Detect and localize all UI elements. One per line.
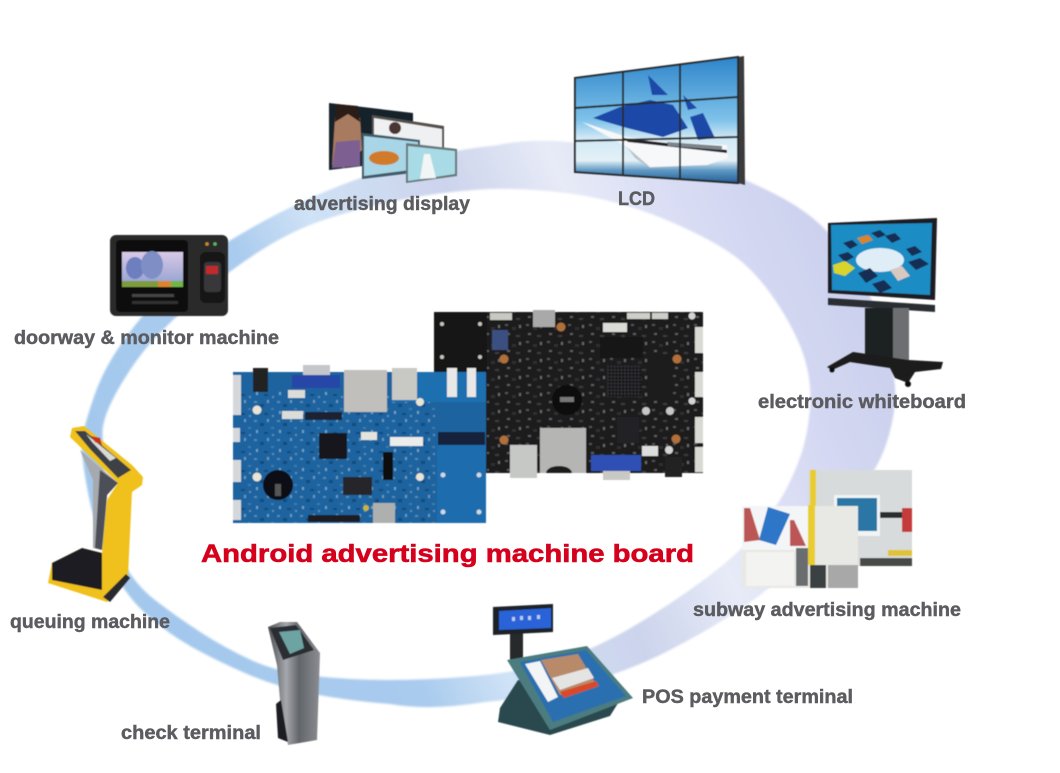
label: check terminal: check terminal	[121, 722, 261, 744]
main boards	[233, 310, 703, 523]
label: subway advertising machine: subway advertising machine	[693, 599, 961, 621]
icon: check terminal	[268, 622, 320, 745]
black board	[434, 310, 703, 480]
label: electronic whiteboard: electronic whiteboard	[758, 391, 966, 413]
icon: LCD video wall	[575, 56, 745, 185]
blue board	[233, 365, 486, 523]
icon: doorway and monitor machine	[110, 235, 228, 316]
title: Android advertising machine board	[201, 540, 694, 568]
icon: POS payment terminal	[493, 604, 633, 735]
label: advertising display: advertising display	[294, 193, 470, 215]
label: LCD: LCD	[618, 188, 655, 210]
label: queuing machine: queuing machine	[10, 611, 170, 633]
label: doorway and monitor machine: doorway & monitor machine	[14, 327, 279, 349]
icon: queuing machine	[48, 426, 143, 602]
icon: advertising display	[329, 103, 457, 183]
icon: subway advertising machine	[742, 470, 912, 588]
label: POS payment terminal: POS payment terminal	[642, 686, 853, 708]
icon: electronic whiteboard	[827, 218, 943, 387]
application ring	[82, 141, 895, 707]
